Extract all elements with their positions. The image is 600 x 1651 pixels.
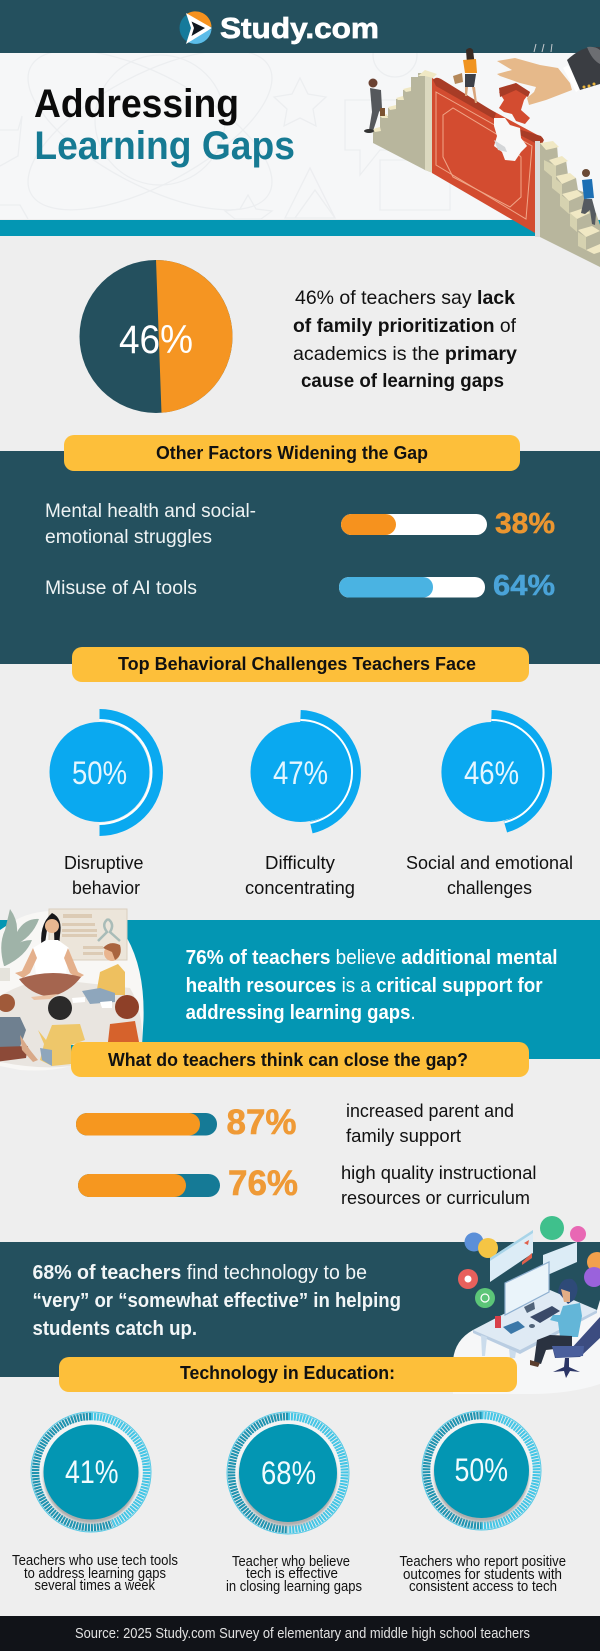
- person: man on left stairs: [364, 78, 385, 133]
- heading: behavioral challenges: [72, 647, 529, 682]
- child middle: [48, 996, 72, 1020]
- teal band: [0, 220, 600, 236]
- text block: primary cause: 46% of teachers say lack: [295, 287, 515, 309]
- title: Learning Gaps: [34, 124, 295, 168]
- footer source bar: Source: 2025 Study.com Survey of elementary and middle high school teachers: [75, 1626, 530, 1642]
- heading: behavioral challenges: Top Behavioral Challenges Teachers Face: [118, 654, 476, 674]
- child far right: [115, 995, 139, 1019]
- heading: close the gap: [71, 1042, 529, 1077]
- teacher: [41, 913, 61, 960]
- bar: 87% parent support: [76, 1101, 514, 1146]
- heading: other factors: Other Factors Widening the Gap: [156, 443, 428, 463]
- panel: technology effectiveness: “very” or “somewhat effective” in helping: [32, 1290, 401, 1312]
- side post: [535, 141, 540, 237]
- hero panel: [0, 18, 600, 242]
- stat: 47% difficulty concentrating: concentrating: [245, 877, 355, 898]
- stat: 50% disruptive behavior: [50, 715, 157, 898]
- stat: 46% social and emotional challenges: 46%: [464, 755, 519, 791]
- puzzle gap: [494, 118, 527, 161]
- bar: 87% parent support: family support: [346, 1126, 461, 1146]
- footer source bar: [0, 1616, 600, 1651]
- bar: 38%: [341, 508, 555, 540]
- panel: other factors: [0, 451, 600, 664]
- header bar with logo: [0, 0, 600, 53]
- floating windows: [490, 1230, 533, 1282]
- bar: 76% instructional resources: high quality instructional: [341, 1163, 536, 1183]
- desk items: [503, 1321, 525, 1334]
- heading: other factors: [64, 435, 520, 471]
- stat: 47% difficulty concentrating: [245, 716, 355, 898]
- panel: mental health resources: health resources is a critical support for: [186, 975, 543, 997]
- text block: primary cause: [293, 287, 517, 392]
- panel: technology effectiveness: students catch up.: [32, 1318, 197, 1340]
- caption: 50%: [400, 1554, 566, 1595]
- panel: mental health resources: [0, 920, 600, 1059]
- bar: 76% instructional resources: [78, 1163, 536, 1208]
- text block: primary cause: of family prioritization of: [293, 315, 517, 337]
- caption: 50%: Teachers who report positive: [400, 1554, 566, 1570]
- child right: [104, 945, 120, 961]
- bar: 87% parent support: 87%: [226, 1103, 296, 1142]
- red door: [432, 78, 543, 233]
- panel: mental health resources: 76% of teachers believe additional mental: [186, 947, 558, 969]
- bar: 87% parent support: increased parent and: [346, 1101, 514, 1121]
- stat: 50% disruptive behavior: behavior: [72, 877, 140, 898]
- stat ring: 50%: 50%: [454, 1452, 508, 1488]
- desk: [473, 1290, 597, 1350]
- bar: 64%: 64%: [493, 570, 555, 602]
- icon: Study.com logo: [180, 11, 212, 44]
- illustration: teacher and students: [0, 909, 144, 1070]
- factor label: mental health: Mental health and social-: [45, 501, 256, 522]
- heading: technology in education: [59, 1357, 517, 1392]
- panel: technology effectiveness: [0, 1242, 600, 1377]
- factor label: mental health: emotional struggles: [45, 527, 212, 548]
- bar: 76% instructional resources: 76%: [228, 1164, 298, 1203]
- stat: 50% disruptive behavior: 50%: [72, 755, 127, 791]
- held puzzle piece: [499, 83, 530, 124]
- caption: 68%: tech is effective: [246, 1566, 338, 1582]
- title: Addressing: [34, 82, 239, 126]
- right stair wall: [540, 143, 600, 267]
- caption: 68%: [226, 1554, 362, 1595]
- caption: 41%: [12, 1553, 178, 1594]
- stat ring: 50%: [422, 1411, 541, 1530]
- stat: 50% disruptive behavior: Disruptive: [64, 852, 144, 873]
- stat ring: 41%: [31, 1412, 151, 1532]
- factor label: mental health: [45, 501, 256, 548]
- stat: 46% social and emotional challenges: Social and emotional: [406, 852, 573, 873]
- caption: 41%: several times a week: [34, 1578, 156, 1594]
- stat ring: 68%: 68%: [261, 1455, 316, 1491]
- stat: 46% social and emotional challenges: challenges: [447, 877, 532, 898]
- plant: [1, 909, 39, 966]
- person: man on right stairs: [581, 169, 596, 225]
- bar: 76% instructional resources: resources or curriculum: [341, 1188, 530, 1208]
- stat ring: 68%: [227, 1412, 349, 1534]
- poster: [49, 909, 127, 960]
- heading: close the gap: What do teachers think can close the gap?: [108, 1050, 468, 1070]
- bar: 64%: [339, 570, 555, 602]
- caption: 68%: Teacher who believe: [232, 1554, 350, 1570]
- chair: [552, 1317, 600, 1358]
- text block: primary cause: academics is the primary: [293, 343, 517, 365]
- person: woman on top of wall: [453, 48, 477, 103]
- caption: 50%: consistent access to tech: [409, 1579, 557, 1595]
- heading: technology in education: Technology in Education:: [180, 1363, 395, 1383]
- person: [558, 1279, 578, 1304]
- stat: 46% social and emotional challenges: [406, 716, 573, 898]
- pie chart: 46%: [80, 260, 232, 413]
- hero illustration: puzzle wall with people: [364, 44, 600, 267]
- bar: 38%: 38%: [495, 508, 555, 540]
- monitor: [505, 1262, 549, 1315]
- pie chart: 46%: 46%: [119, 318, 193, 362]
- stat ring: 41%: 41%: [65, 1454, 118, 1490]
- title: [34, 82, 295, 168]
- panel: mental health resources: addressing learning gaps.: [186, 1002, 416, 1024]
- factor label: AI tools: Misuse of AI tools: [45, 578, 197, 599]
- logo wordmark: Study.com: [220, 13, 379, 45]
- left stair wall: [373, 73, 433, 173]
- caption: 41%: to address learning gaps: [24, 1566, 166, 1582]
- stat: 47% difficulty concentrating: 47%: [273, 755, 328, 791]
- caption: 41%: Teachers who use tech tools: [12, 1553, 178, 1569]
- illustration: person at computer with tech icons: [453, 1216, 600, 1394]
- stat: 47% difficulty concentrating: Difficulty: [265, 852, 336, 873]
- text block: primary cause: cause of learning gaps: [301, 370, 504, 392]
- caption: 50%: outcomes for students with: [403, 1567, 562, 1583]
- hand and sleeve: [497, 58, 572, 105]
- panel: technology effectiveness: 68% of teachers find technology to be: [32, 1262, 367, 1284]
- child left: [0, 994, 15, 1012]
- caption: 68%: in closing learning gaps: [226, 1579, 362, 1595]
- app icons: [458, 1216, 600, 1308]
